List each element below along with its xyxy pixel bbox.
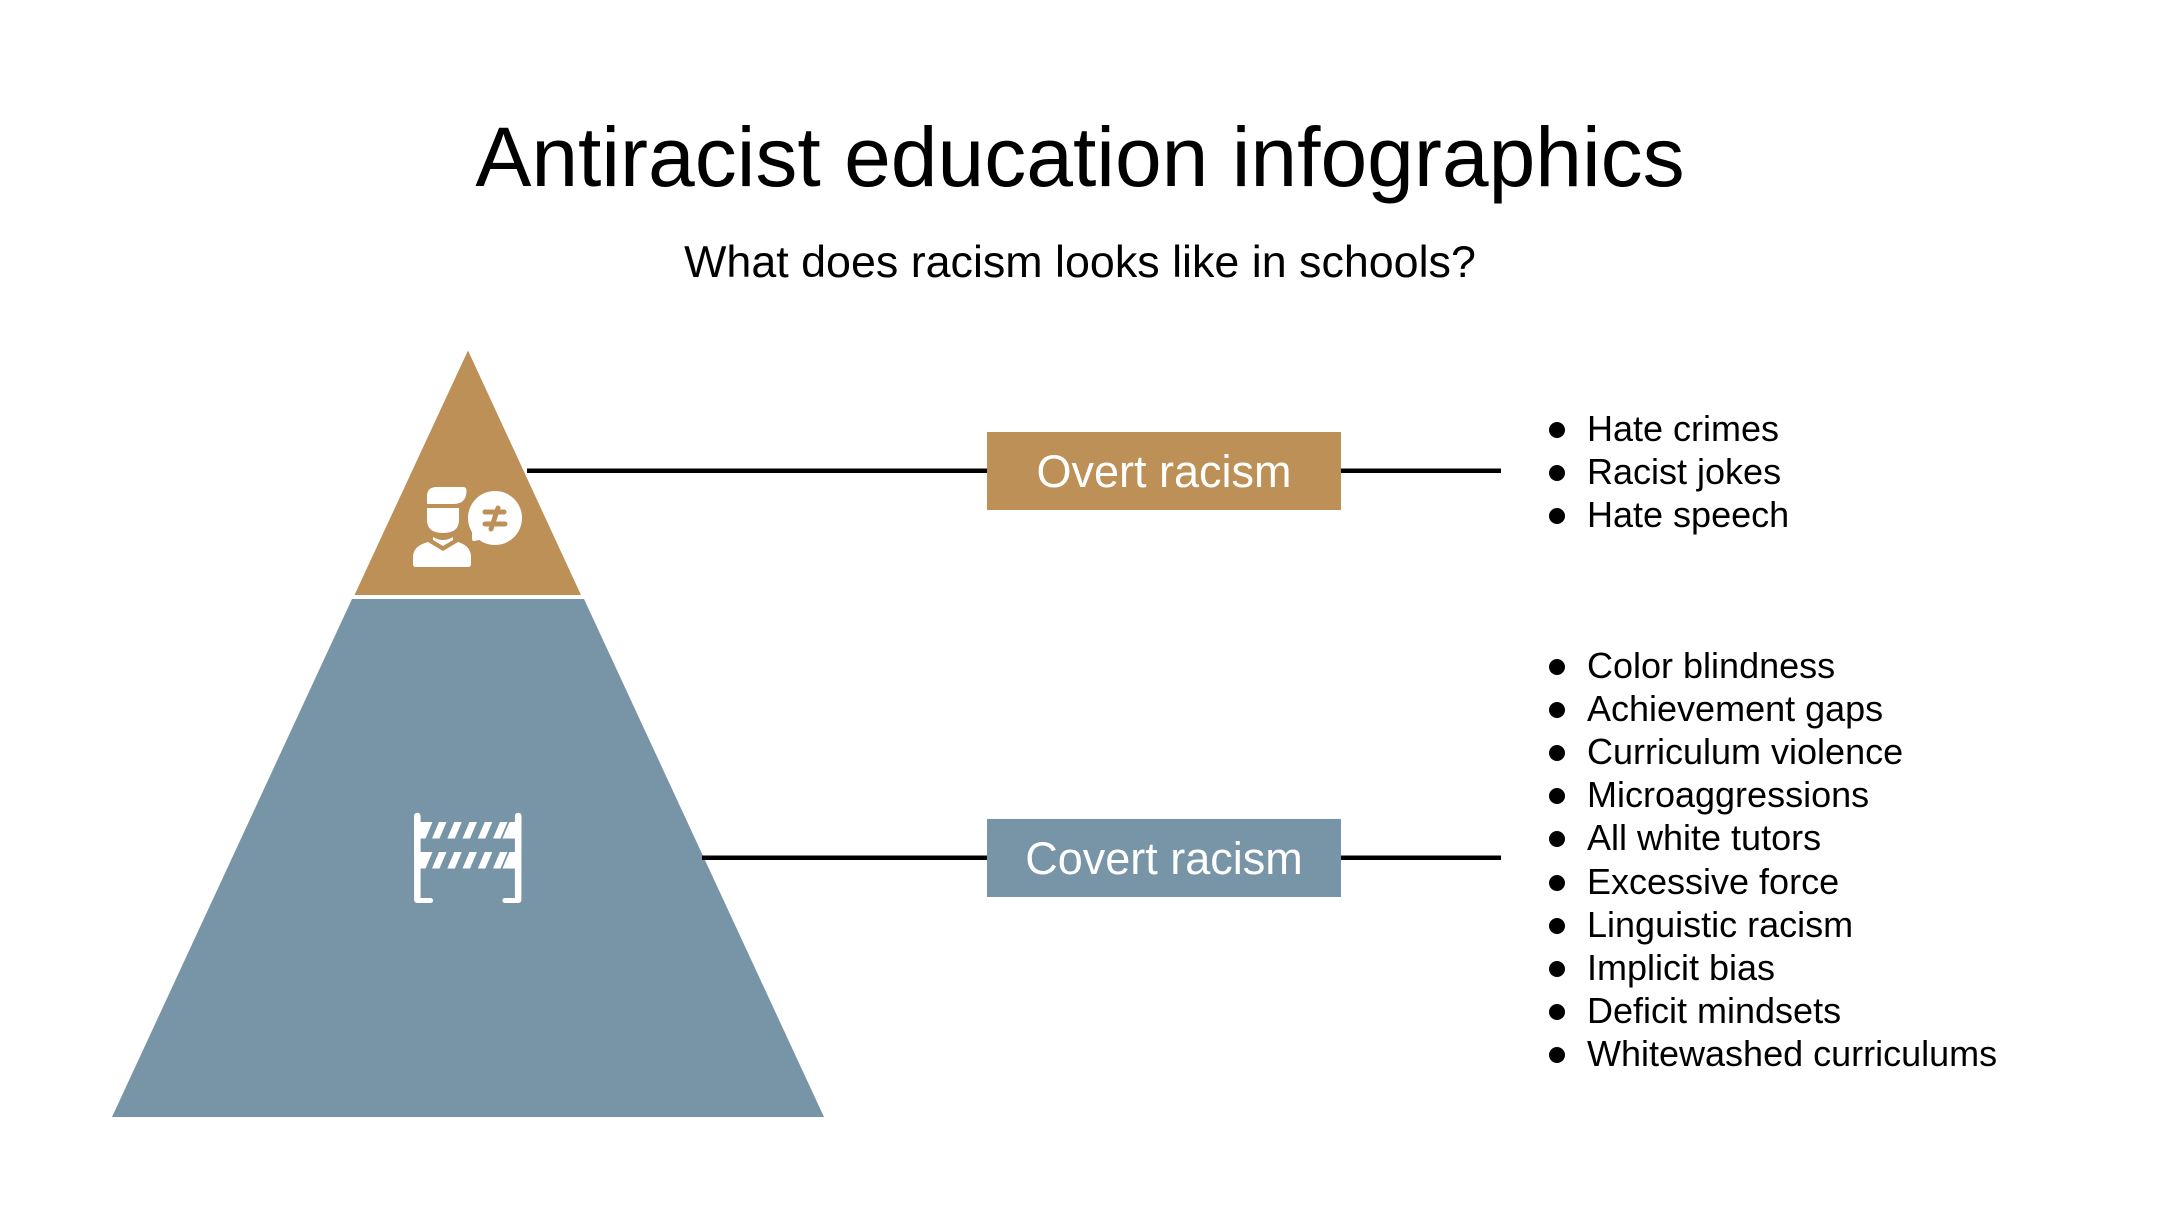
label: covert racism (987, 819, 1341, 897)
pyramid top: overt tier (354, 350, 581, 595)
list: covert racism examples: Linguistic racism (1587, 904, 1853, 945)
title: Antiracist education infographics (475, 110, 1685, 204)
list: covert racism examples: Microaggressions (1587, 774, 1869, 815)
list: overt racism examples: Hate speech (1587, 494, 1789, 535)
icon: person with not-equal speech bubble (413, 487, 522, 567)
list: overt racism examples: Racist jokes (1587, 451, 1781, 492)
label: covert racism: Covert racism (1025, 833, 1303, 884)
list: overt racism examples (1549, 408, 1789, 535)
connector: covert to list (1341, 856, 1501, 860)
list: covert racism examples: Curriculum violence (1587, 731, 1903, 772)
icon: road barrier (414, 813, 522, 903)
label: overt racism: Overt racism (1036, 446, 1292, 497)
list: covert racism examples: Excessive force (1587, 861, 1839, 902)
list: covert racism examples: All white tutors (1587, 817, 1821, 858)
list: covert racism examples: Color blindness (1587, 644, 1835, 686)
list: covert racism examples: Deficit mindsets (1587, 990, 1841, 1031)
list: covert racism examples (1549, 644, 1997, 1074)
list: overt racism examples: Hate crimes (1587, 408, 1779, 449)
label: overt racism (987, 432, 1341, 510)
list: covert racism examples: Achievement gaps (1587, 688, 1883, 729)
connector: covert to left (702, 856, 988, 860)
list: covert racism examples: Implicit bias (1587, 947, 1775, 988)
connector: overt to list (1341, 468, 1501, 473)
list: covert racism examples: Whitewashed curriculums (1587, 1033, 1997, 1074)
pyramid bottom: covert tier (112, 599, 824, 1117)
connector: overt to left (527, 468, 988, 473)
subtitle: What does racism looks like in schools? (684, 237, 1476, 287)
